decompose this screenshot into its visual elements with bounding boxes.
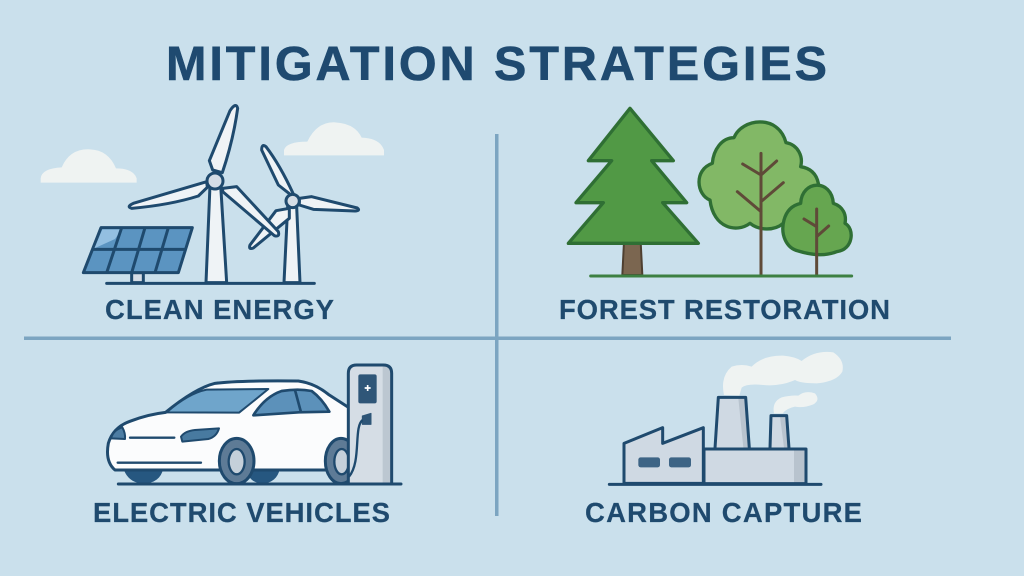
label: forest restoration: FOREST RESTORATION: [559, 294, 890, 325]
icon: headlight: [111, 427, 125, 439]
icon: sawtooth building: [624, 428, 703, 483]
icon: car body: [107, 381, 350, 470]
icon: charging station: [348, 365, 392, 483]
icon: front wheel: [219, 438, 254, 484]
icon: electric car and charger: [107, 365, 401, 484]
icon: large smoke plume: [723, 352, 843, 396]
title: MITIGATION STRATEGIES: [166, 37, 827, 91]
panel: forest restoration: [559, 108, 890, 325]
panel: electric vehicles: [93, 365, 401, 528]
icon: large round tree: [699, 122, 818, 275]
icon: clean energy illustration: [41, 105, 384, 283]
ground line: [118, 479, 401, 488]
label: electric vehicles: ELECTRIC VEHICLES: [93, 497, 390, 528]
icon: short chimney: [770, 416, 789, 448]
icon: rear wheel: [325, 438, 357, 484]
icon: right cloud: [284, 122, 384, 155]
icon: side windows: [253, 390, 329, 415]
icon: large wind turbine: [129, 105, 279, 283]
icon: windshield: [167, 389, 268, 413]
icon: tall chimney: [715, 397, 749, 448]
icon: car side light: [181, 428, 219, 442]
ground line: [609, 480, 821, 489]
label: carbon capture: CARBON CAPTURE: [585, 497, 862, 528]
icon: pine tree: [568, 108, 698, 275]
icon: forest illustration: [568, 108, 852, 276]
ground line: [591, 271, 852, 280]
icon: small round tree: [783, 185, 851, 275]
icon: factory illustration: [609, 352, 843, 484]
icon: small smoke plume: [774, 392, 817, 413]
panel: carbon capture: [585, 352, 862, 528]
icon: solar panel: [83, 228, 192, 283]
icon: main building: [704, 449, 806, 484]
ground line: [107, 279, 314, 288]
icon: far wheels: [123, 468, 280, 483]
panel: clean energy: [41, 105, 384, 325]
icon: factory windows: [638, 457, 691, 467]
icon: left cloud: [41, 149, 137, 183]
label: clean energy: CLEAN ENERGY: [105, 294, 334, 325]
icon: small wind turbine: [250, 146, 359, 283]
